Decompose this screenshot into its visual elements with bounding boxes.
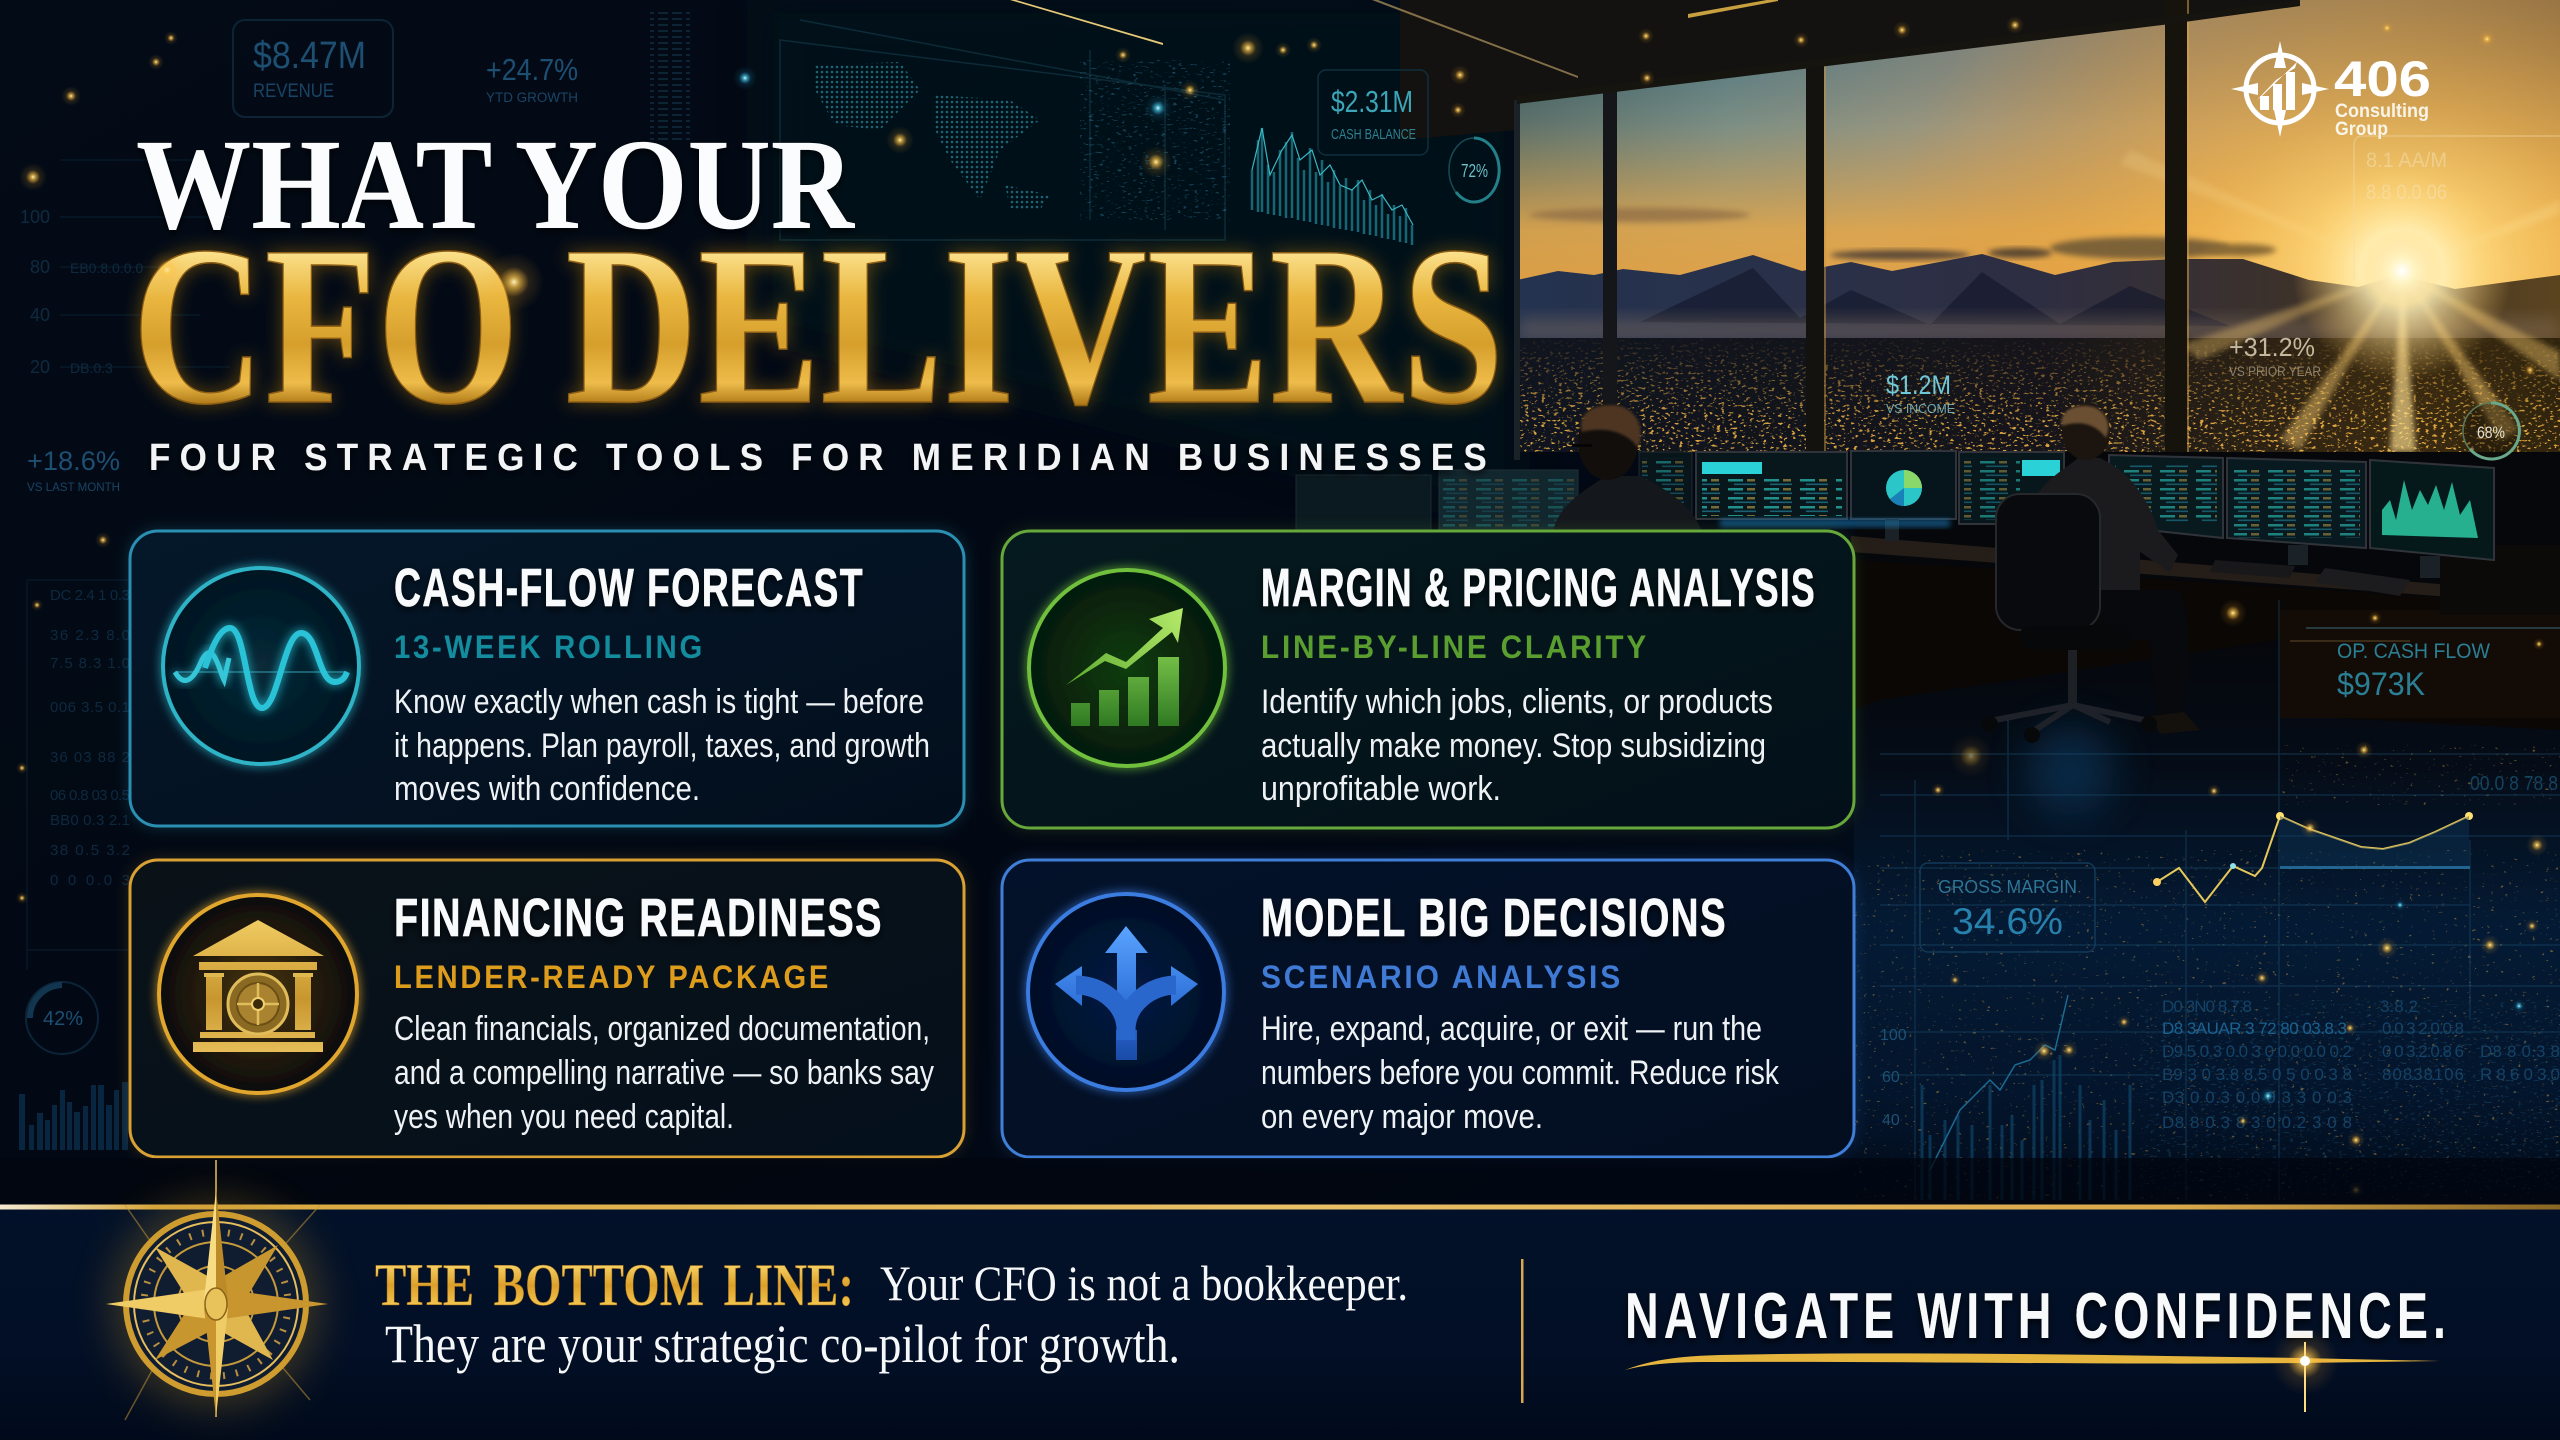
bottom line label: THE BOTTOM LINE: <box>375 1252 854 1318</box>
world map dots <box>815 62 1050 210</box>
faint window panel <box>2354 136 2560 280</box>
description: Clean financials, organized documentation, <box>394 1010 930 1048</box>
description <box>394 683 930 808</box>
panel: margin and pricing analysis <box>1002 531 1854 828</box>
left chart axis: 20 <box>30 357 50 377</box>
sunset window view <box>1517 0 2560 460</box>
panel: model big decisions <box>1002 860 1854 1157</box>
operating cash flow stat: OP. CASH FLOW <box>2337 640 2490 663</box>
description: unprofitable work. <box>1261 770 1501 808</box>
description: Identify which jobs, clients, or products <box>1261 683 1773 721</box>
cardinal star points <box>106 1190 328 1417</box>
left chart axis: 100 <box>20 207 50 227</box>
lower right data rows: R 8 6 0 3.0 <box>2480 1065 2560 1084</box>
gross margin panel: GROSS MARGIN <box>1938 877 2077 897</box>
person seated at right with chair <box>1982 404 2200 743</box>
net income stat <box>1886 370 1955 416</box>
person seated at left <box>1553 404 1702 532</box>
left data rows: 0 0 0.0 3 <box>50 872 130 889</box>
left data rows: BB0 0.3 2.1 <box>50 812 130 829</box>
background: control room scene <box>1010 0 2560 1200</box>
logo wordmark: 406 <box>2334 51 2431 107</box>
logo subtitle <box>2335 100 2429 140</box>
left dashboard wall tint <box>760 0 1517 520</box>
top dashboard tech lines <box>780 20 1225 240</box>
revenue panel: $8.47M <box>253 35 366 77</box>
prior year stat <box>2229 332 2321 379</box>
left chart axis: 40 <box>30 305 50 325</box>
ceiling over the windows <box>1400 0 2300 140</box>
bottom line text <box>375 1252 1408 1374</box>
monitors <box>1296 451 2494 596</box>
heading: CASH-FLOW FORECAST <box>394 558 864 618</box>
lower right data rows: 0 0 3.2.0.8 6 <box>2382 1042 2464 1061</box>
last month stat: VS LAST MONTH <box>27 480 120 494</box>
description: moves with confidence. <box>394 770 700 808</box>
logo subtitle: Group <box>2335 118 2388 140</box>
vertical divider <box>1521 1259 1524 1403</box>
42 percent ring <box>26 982 98 1054</box>
heading: MARGIN & PRICING ANALYSIS <box>1261 558 1816 618</box>
heading: MODEL BIG DECISIONS <box>1261 888 1727 948</box>
heading: FINANCING READINESS <box>394 888 883 948</box>
revenue panel: REVENUE <box>253 81 334 102</box>
operating cash flow stat: $973K <box>2337 666 2425 702</box>
left chart axis <box>20 160 230 377</box>
gold rule <box>0 1204 2560 1210</box>
lower right axis and area chart: 60 <box>1882 1069 1900 1086</box>
left chart axis: EB0.8.0.0.0 <box>70 260 143 276</box>
lower right axis and area chart: 40 <box>1882 1112 1900 1129</box>
diagonal star points <box>155 1245 278 1360</box>
bottom line first sentence: Your CFO is not a bookkeeper. <box>880 1255 1408 1311</box>
title: cfo delivers: CFO DELIVERS <box>132 200 1504 452</box>
lower right data rows: D8 8 0.3 8 <box>2480 1042 2560 1061</box>
icon: bank vault <box>159 895 357 1093</box>
left data rows: 006 3.5 0.1 <box>50 699 130 716</box>
description: actually make money. Stop subsidizing <box>1261 727 1766 765</box>
description: Know exactly when cash is tight — before <box>394 683 924 721</box>
left bar chart <box>19 1082 128 1150</box>
subtitle: FOUR STRATEGIC TOOLS FOR MERIDIAN BUSINESSES <box>149 437 1496 479</box>
lower right data rows <box>2162 997 2560 1132</box>
description: Hire, expand, acquire, or exit — run the <box>1261 1010 1762 1048</box>
subheading: 13-WEEK ROLLING <box>394 629 705 665</box>
room: desk, floor, cabinets <box>1851 452 2560 1212</box>
window frame mullions <box>1010 0 2300 460</box>
logo: 406 consulting group <box>2231 41 2431 140</box>
last month stat: +18.6% <box>27 446 120 476</box>
prior year stat: +31.2% <box>2229 332 2315 362</box>
lower right data rows: D8 3AUAR 3 72 80 03.8.3 <box>2162 1019 2347 1038</box>
subheading: LENDER-READY PACKAGE <box>394 959 831 995</box>
title: what your: WHAT YOUR <box>136 113 856 257</box>
lower right data rows: D8 8 0.3 8 3 0 0.2 3 0 8 <box>2162 1113 2352 1132</box>
cash balance stat: CASH BALANCE <box>1331 126 1416 143</box>
logo mark <box>2231 41 2329 137</box>
description <box>1261 683 1773 808</box>
lower right data rows: D0 3N0 8.7.8 <box>2162 997 2252 1016</box>
net income stat: VS INCOME <box>1886 401 1955 416</box>
faint window panel: 8.1 AA/M <box>2366 149 2447 172</box>
subheading: SCENARIO ANALYSIS <box>1261 959 1623 995</box>
description: numbers before you commit. Reduce risk <box>1261 1054 1780 1092</box>
ytd growth stat: +24.7% <box>486 52 578 87</box>
gross margin panel <box>1920 863 2095 952</box>
icon: gold compass <box>20 1160 380 1420</box>
left data rows: DC 2.4 1 0.3 <box>50 587 130 604</box>
sun and rays <box>2120 150 2560 452</box>
description: on every major move. <box>1261 1098 1543 1136</box>
description: yes when you need capital. <box>394 1098 734 1136</box>
panel: cash-flow forecast <box>130 531 964 826</box>
cash balance stat: $2.31M <box>1331 84 1413 119</box>
left data rows: 06 0.8 03 0.5 <box>50 787 130 804</box>
operating cash flow stat <box>2306 628 2560 702</box>
bottom band <box>0 1158 2560 1440</box>
gold swoosh <box>1625 1327 2440 1412</box>
revenue panel <box>233 20 393 117</box>
subheading: LINE-BY-LINE CLARITY <box>1261 629 1649 665</box>
lower right data rows: 8 0 8.3 8.1 0 6 <box>2382 1065 2464 1084</box>
description <box>394 1010 934 1136</box>
prior year stat: VS PRIOR YEAR <box>2229 363 2321 379</box>
bottom line second sentence: They are your strategic co-pilot for growth. <box>385 1314 1180 1374</box>
logo subtitle: Consulting <box>2335 100 2429 122</box>
pie on monitor <box>1886 470 1922 506</box>
description: and a compelling narrative — so banks say <box>394 1054 934 1092</box>
faint window panel: 8.8 0.0 06 <box>2366 181 2447 204</box>
72 percent ring: 72% <box>1461 161 1488 181</box>
left data rows: 38 0.5 3.2 <box>50 842 130 859</box>
lower right grid lines <box>1880 600 2560 1200</box>
68 percent ring: 68% <box>2477 423 2505 442</box>
lower right data rows: B9 3 0 3.8 8.5 0 5 0 0 3 8 <box>2162 1065 2352 1084</box>
description <box>1261 1010 1780 1136</box>
lower right axis and area chart <box>1880 995 2130 1200</box>
left data rows: 36 2.3 8.0 <box>50 627 130 644</box>
lower right data rows: D9 5 0.3 0.0 3 0 0.0 0.0 0.2 <box>2162 1042 2352 1061</box>
left data rows <box>27 580 130 970</box>
42 percent ring: 42% <box>43 1008 83 1030</box>
lower right data rows: 0.0 3 2.0.0.8 <box>2382 1019 2464 1038</box>
lower right axis and area chart: 100 <box>1880 1027 1907 1044</box>
left data rows: 36 03 88 2 <box>50 749 130 766</box>
gross margin panel: 34.6% <box>1952 901 2063 942</box>
icon: cash-flow wave <box>163 568 359 764</box>
cash balance stat <box>1318 70 1428 155</box>
68 percent ring <box>2463 403 2519 459</box>
left data rows: 7.5 8.3 1.0 <box>50 655 130 672</box>
call to action <box>1625 1279 2451 1412</box>
description: it happens. Plan payroll, taxes, and growth <box>394 727 930 765</box>
ytd growth stat: YTD GROWTH <box>486 89 578 105</box>
gold line chart <box>2153 812 2473 902</box>
last month stat <box>27 446 120 494</box>
panel: financing readiness <box>130 860 964 1157</box>
net income stat: $1.2M <box>1886 370 1951 400</box>
lower right data rows: D3 0 0.3 0.0 0.3 3 0 0.3 <box>2162 1088 2352 1107</box>
lower right data rows: 3.8.2 <box>2380 997 2418 1016</box>
72 percent ring <box>1449 138 1499 202</box>
icon: growth chart <box>1029 570 1225 766</box>
icon: branching arrows <box>1028 894 1224 1090</box>
left chart axis: DB.0.3 <box>70 360 113 376</box>
ytd growth stat <box>486 52 578 105</box>
teal spike chart <box>1252 128 1413 245</box>
left chart axis: 80 <box>30 257 50 277</box>
